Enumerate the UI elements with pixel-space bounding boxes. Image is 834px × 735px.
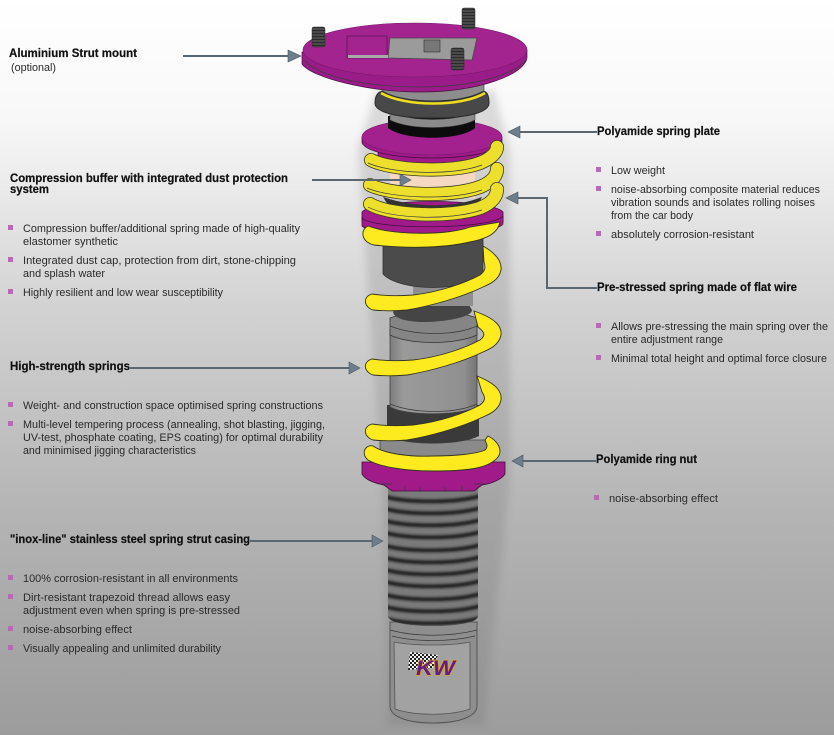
text: polyamide spring plate: absolutely corrosion-resistant: [611, 229, 754, 241]
suspension strut illustration: [302, 8, 527, 726]
KW logo: KW: [416, 657, 457, 680]
text: compression buffer: Integrated dust cap, protection from dirt, stone-chipping: [23, 255, 296, 267]
text: polyamide spring plate: [596, 126, 820, 241]
spring plate neck: [378, 145, 487, 174]
text: compression buffer: Compression buffer/additional spring made of high-quality: [23, 223, 300, 235]
dark buffer section: [387, 405, 479, 444]
text: polyamide spring plate: noise-absorbing composite material reduces: [611, 184, 820, 196]
top bearing: [375, 82, 489, 128]
text: high-strength springs: High-strength springs: [10, 361, 130, 373]
text: pre-stressed spring: entire adjustment range: [611, 334, 723, 346]
dark bump stop cylinder: [383, 232, 483, 288]
text: inox-line casing: 100% corrosion-resistant in all environments: [23, 573, 238, 585]
text: polyamide ring nut: [594, 454, 718, 505]
ring nut: [362, 462, 505, 492]
mount bolts: [312, 8, 475, 70]
aluminium strut mount: [302, 8, 527, 92]
text: high-strength springs: [8, 361, 325, 457]
text: inox-line casing: Dirt-resistant trapezoid thread allows easy: [23, 592, 231, 604]
text: pre-stressed spring: Allows pre-stressing the main spring over the: [611, 321, 828, 333]
text: inox-line casing: [8, 534, 250, 655]
text: compression buffer: and splash water: [23, 268, 105, 280]
text: inox-line casing: noise-absorbing effect: [23, 624, 132, 636]
text: inox-line casing: adjustment even when spring is pre-stressed: [23, 605, 240, 617]
text: polyamide spring plate: Polyamide spring plate: [597, 126, 720, 138]
text: polyamide spring plate: Low weight: [611, 165, 665, 177]
text: polyamide spring plate: vibration sounds and isolates rolling noises: [611, 197, 815, 209]
lower canister with logo: [390, 622, 477, 723]
text: aluminium strut mount: Aluminium Strut mount: [9, 48, 137, 60]
text: inox-line casing: "inox-line" stainless steel spring strut casing: [10, 534, 250, 546]
text: polyamide spring plate: from the car body: [611, 210, 693, 222]
text: aluminium strut mount: (optional): [11, 62, 56, 74]
text: compression buffer: Highly resilient and low wear susceptibility: [23, 287, 223, 299]
text: polyamide ring nut: Polyamide ring nut: [596, 454, 697, 466]
soft shadow: [358, 90, 510, 726]
text: compression buffer: [8, 173, 300, 299]
arrows: [130, 50, 597, 547]
bottom spring plate ring: [362, 202, 503, 231]
main grey cylinder: [388, 303, 478, 420]
neck: [413, 282, 473, 306]
polyamide spring plate: [362, 116, 502, 158]
main yellow spring coils: [363, 222, 501, 471]
text: high-strength springs: Multi-level tempering process (annealing, shot blasting, jigging,: [23, 419, 325, 431]
text: pre-stressed spring: Minimal total height and optimal force closure: [611, 353, 827, 365]
text: inox-line casing: Visually appealing and unlimited durability: [23, 643, 221, 655]
text: compression buffer: Compression buffer with integrated dust protection: [10, 173, 288, 185]
text: high-strength springs: Weight- and construction space optimised spring constructions: [23, 400, 323, 412]
ring under flat wire: [362, 216, 503, 235]
text: compression buffer: system: [10, 184, 49, 196]
text: high-strength springs: UV-test, phosphate coating, EPS coating) for optimal durability: [23, 432, 323, 444]
compression buffer: [383, 165, 482, 212]
text: aluminium strut mount: [9, 48, 137, 74]
text: high-strength springs: and minimised jigging characteristics: [23, 445, 196, 457]
text: polyamide ring nut: noise-absorbing effect: [609, 493, 718, 505]
text: compression buffer: elastomer synthetic: [23, 236, 118, 248]
text: pre-stressed spring: Pre-stressed spring made of flat wire: [597, 282, 797, 294]
grey adjuster collar: [380, 440, 487, 468]
flat wire spring coils: [367, 147, 497, 217]
ribbed stainless casing: [386, 486, 480, 628]
text: pre-stressed spring: [596, 282, 828, 365]
